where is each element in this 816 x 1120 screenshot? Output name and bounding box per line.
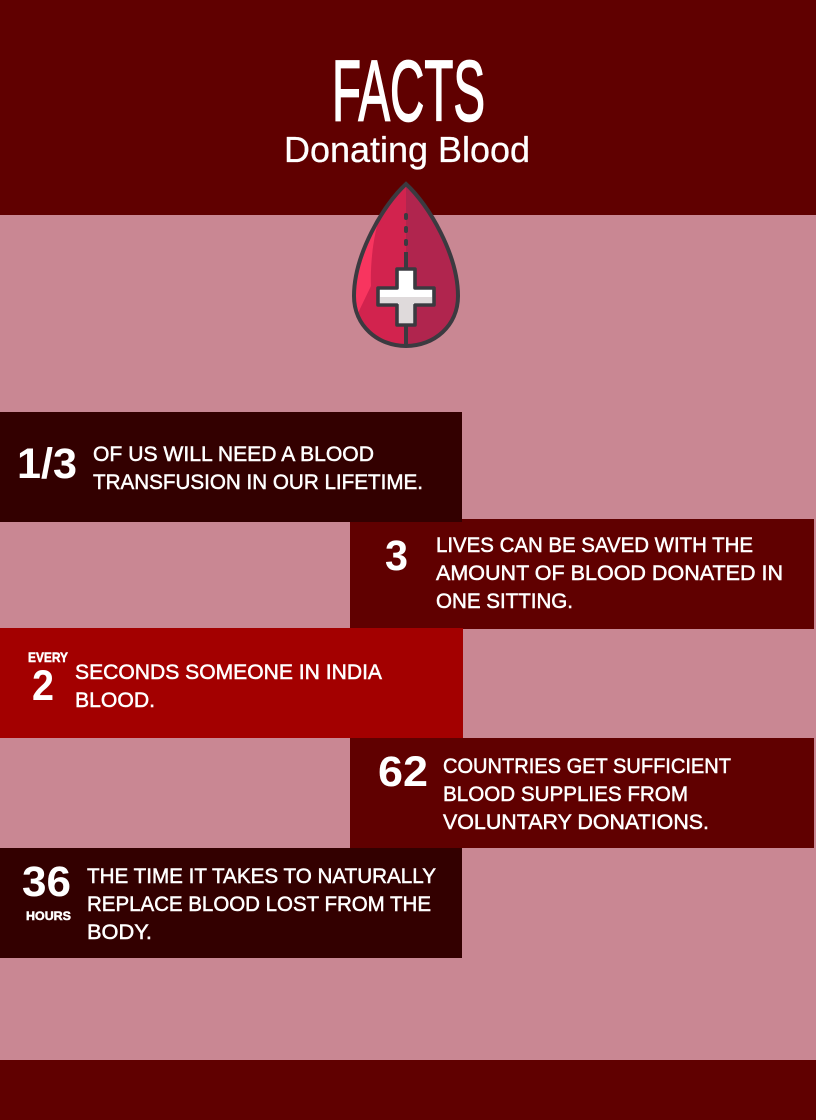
text: countries: BLOOD SUPPLIES FROM [443,783,688,806]
text: seconds: BLOOD. [75,689,155,712]
text: lives saved [436,534,783,613]
text: lives saved: LIVES CAN BE SAVED WITH THE [436,534,753,557]
footer band [0,1060,816,1120]
panel: fact 4, 62 countries [350,738,814,848]
subtitle: Donating Blood [284,129,530,170]
text: replace blood [87,865,436,944]
icon: blood drop with cross [354,184,458,346]
label: hours: HOURS [26,909,71,923]
number: 1/3: 1/3 [17,440,77,488]
number: 36: 36 [22,858,71,906]
label: every: EVERY [28,649,69,665]
text: lives saved: ONE SITTING. [436,590,573,613]
number: 62: 62 [378,748,428,796]
number: 3: 3 [385,532,408,580]
title: FACTS [332,44,485,140]
text: countries: VOLUNTARY DONATIONS. [443,811,709,834]
text: replace blood: BODY. [87,921,152,944]
text: transfusion [93,443,423,494]
text: countries: COUNTRIES GET SUFFICIENT [443,755,731,778]
text: seconds [75,661,382,712]
text: replace blood: REPLACE BLOOD LOST FROM THE [87,893,431,916]
panel: fact 1, one third [0,412,462,522]
panel: fact 5, 36 hours [0,848,462,958]
panel: fact 2, three lives [350,519,814,629]
text: countries [443,755,731,834]
text: transfusion: OF US WILL NEED A BLOOD [93,443,374,466]
header band [0,0,816,215]
number: 2: 2 [32,662,54,710]
text: lives saved: AMOUNT OF BLOOD DONATED IN [436,562,783,585]
text: transfusion: TRANSFUSION IN OUR LIFETIME. [93,471,423,494]
panel: fact 3, every 2 seconds [0,628,463,738]
text: seconds: SECONDS SOMEONE IN INDIA [75,661,382,684]
text: replace blood: THE TIME IT TAKES TO NATURALLY [87,865,436,888]
